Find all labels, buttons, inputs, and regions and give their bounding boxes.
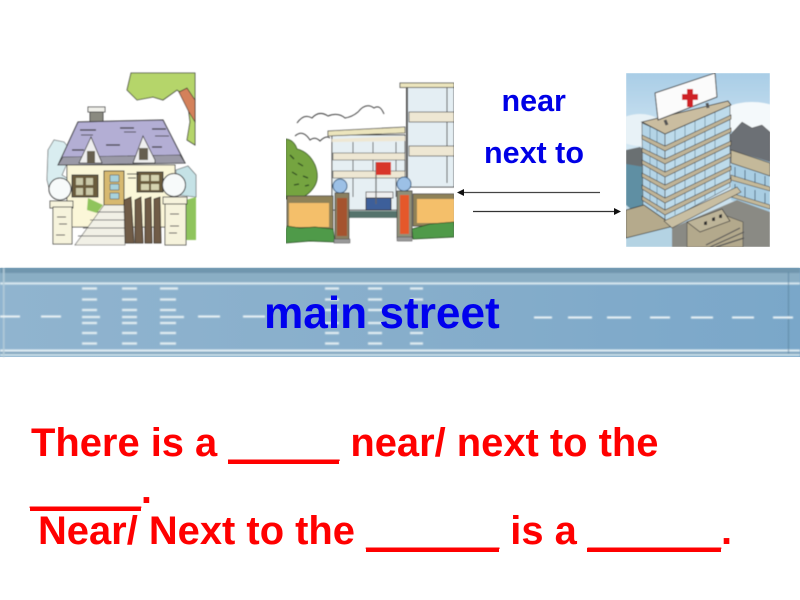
crosswalk stripes <box>82 288 423 344</box>
chimney <box>88 107 105 123</box>
sentence: line two: Near/ Next to the ______ is a ______. <box>38 509 732 553</box>
house walls <box>67 165 175 227</box>
left gate pillar <box>333 179 350 243</box>
right gate pillar <box>397 177 412 241</box>
garden path <box>75 205 125 245</box>
left gate post with globe <box>49 178 73 244</box>
low building <box>328 127 405 210</box>
illustration: school <box>286 83 454 247</box>
sentence: line one: There is a _____ near/ next to the <box>31 421 658 465</box>
flag <box>376 162 391 204</box>
podium and entrance <box>626 187 770 247</box>
right wing <box>731 150 770 215</box>
gate <box>124 197 161 243</box>
arrow: pointing left to school <box>457 189 600 196</box>
label: near: near <box>502 84 566 118</box>
tree <box>286 139 317 199</box>
road: main street <box>0 268 800 357</box>
illustration: hospital <box>626 73 770 247</box>
main tower <box>642 101 731 222</box>
sentence: wrapped blank: _____. <box>29 468 152 512</box>
shrubs <box>47 140 78 195</box>
clouds <box>295 106 384 141</box>
tree behind house <box>127 73 195 145</box>
road label: main street <box>264 289 500 338</box>
roof sign with red cross <box>655 73 717 125</box>
label: next to: next to <box>484 136 584 170</box>
distant trees <box>626 163 644 209</box>
windows and door <box>72 171 163 213</box>
tower building <box>400 83 454 195</box>
front walls and hedges <box>286 194 454 247</box>
sky background <box>626 73 770 226</box>
roof <box>58 120 185 165</box>
lane dashes <box>0 316 793 318</box>
right gate post with globe <box>162 174 196 245</box>
illustration: house <box>47 73 196 245</box>
arrow: pointing right to hospital <box>473 208 621 215</box>
